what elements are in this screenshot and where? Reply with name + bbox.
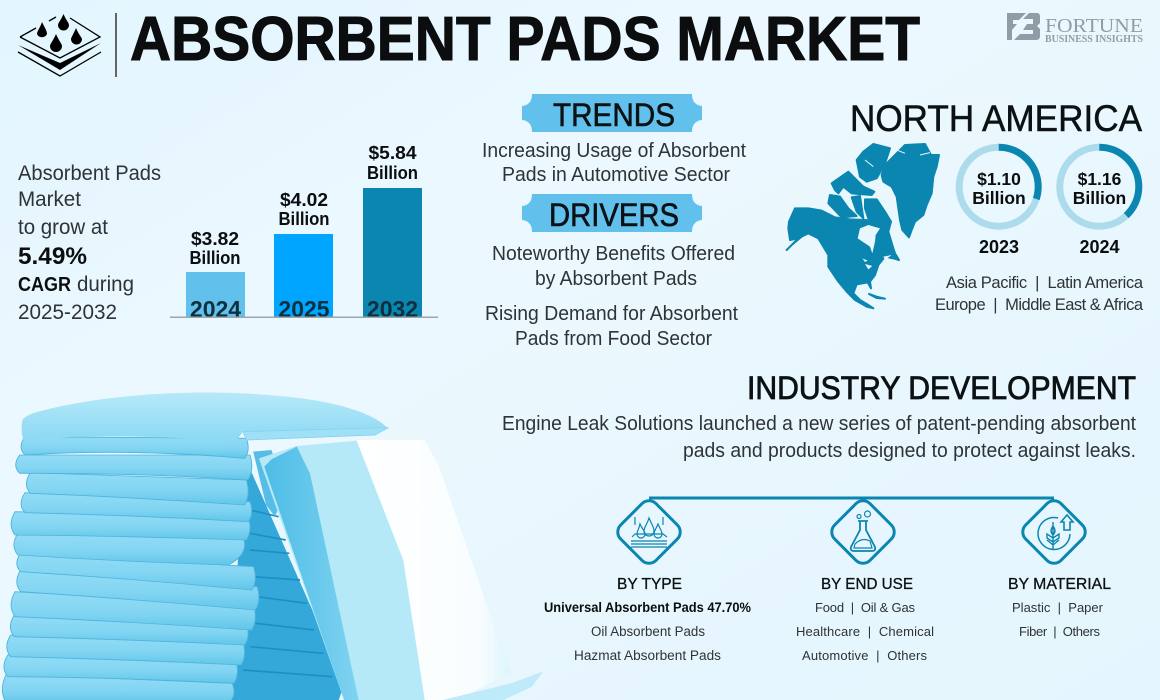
bar 2025: 2025 (278, 296, 330, 322)
illustration: stack of absorbent pads (2, 392, 543, 700)
icon: by type (614, 497, 684, 567)
icon: absorbent pad layers with drops (18, 14, 101, 76)
column: by material: Plastic | Paper (1012, 600, 1104, 615)
logo: Fortune Business Insights: BUSINESS INSIGHTS (1045, 34, 1143, 45)
column: by type: Hazmat Absorbent Pads (574, 648, 721, 663)
bar 2025 (274, 190, 333, 322)
heading: North America: NORTH AMERICA (850, 98, 1142, 139)
heading: industry development: INDUSTRY DEVELOPMENT (747, 370, 1136, 406)
column: by type: Universal Absorbent Pads 47.70% (544, 600, 751, 615)
donut: 2023: 2023 (979, 237, 1019, 257)
text block: trends (482, 140, 746, 186)
column: by end use: BY END USE (821, 576, 913, 593)
donut: 2024: Billion (1073, 188, 1126, 208)
bar 2032 (363, 143, 422, 322)
text block: industry development: Engine Leak Solutions launched a new series of patent-pending absorbent (502, 413, 1136, 435)
map: North America (787, 144, 939, 308)
column: by end use: Automotive | Others (802, 648, 928, 663)
text block: CAGR statement: 2025-2032 (18, 301, 117, 324)
icon: by material (1019, 497, 1089, 567)
donut: 2024: $1.16 (1078, 169, 1122, 189)
icon: by end use (828, 497, 898, 567)
column: by type: Oil Absorbent Pads (591, 624, 705, 639)
bar 2025: $4.02 (280, 190, 328, 210)
text block: CAGR statement: Absorbent Pads (18, 162, 161, 185)
text block: drivers: Pads from Food Sector (515, 328, 712, 350)
text block: industry development: pads and products designed to protect against leaks. (683, 440, 1136, 462)
donut: 2023 (959, 147, 1038, 257)
text block: other regions: Europe | Middle East & Africa (935, 296, 1144, 314)
bar chart: market size (170, 143, 438, 322)
column: by type (544, 576, 751, 663)
logo: Fortune Business Insights: FORTUNE (1045, 15, 1143, 37)
donut: 2024: 2024 (1079, 237, 1120, 257)
text block: CAGR statement: Market (18, 188, 81, 211)
text block: CAGR statement: to grow at (18, 216, 108, 239)
donut: 2023: Billion (972, 188, 1026, 208)
text block: drivers: by Absorbent Pads (535, 268, 697, 290)
donut: 2024 (1060, 147, 1139, 257)
column: by material: BY MATERIAL (1008, 576, 1111, 593)
bar 2025: Billion (278, 209, 330, 229)
connector line (649, 496, 1054, 500)
bar 2024: $3.82 (191, 229, 239, 249)
text block: other regions (935, 274, 1144, 314)
title: ABSORBENT PADS MARKET (130, 5, 920, 74)
bar 2032: 2032 (367, 296, 418, 322)
text block: other regions: Asia Pacific | Latin America (946, 274, 1144, 292)
heading: trends ribbon (522, 94, 702, 133)
text block: CAGR statement (18, 162, 161, 324)
text block: CAGR statement: during (77, 273, 134, 296)
text block: CAGR statement: 5.49% (18, 243, 87, 270)
text block: trends: Pads in Automotive Sector (502, 164, 730, 186)
text block: drivers: Rising Demand for Absorbent (485, 303, 738, 325)
heading: trends ribbon: TRENDS (553, 97, 675, 133)
heading: drivers ribbon: DRIVERS (549, 197, 679, 233)
text block: industry development (502, 413, 1136, 462)
bar 2032: Billion (367, 163, 418, 183)
text block: CAGR statement: CAGR (18, 274, 71, 296)
bar 2024 (186, 229, 245, 322)
column: by material (1008, 576, 1111, 639)
bar 2032: $5.84 (368, 143, 416, 163)
column: by end use: Healthcare | Chemical (796, 624, 934, 639)
text block: drivers: Noteworthy Benefits Offered (492, 243, 735, 265)
column: by end use (796, 576, 934, 663)
text block: trends: Increasing Usage of Absorbent (482, 140, 746, 162)
bar 2024: 2024 (190, 296, 241, 322)
column: by type: BY TYPE (617, 576, 682, 593)
logo: Fortune Business Insights (1007, 13, 1143, 45)
donut: 2023: $1.10 (977, 169, 1021, 189)
text block: drivers (485, 243, 738, 350)
column: by end use: Food | Oil & Gas (815, 600, 916, 615)
bar 2024: Billion (190, 248, 240, 268)
column: by material: Fiber | Others (1019, 624, 1100, 639)
